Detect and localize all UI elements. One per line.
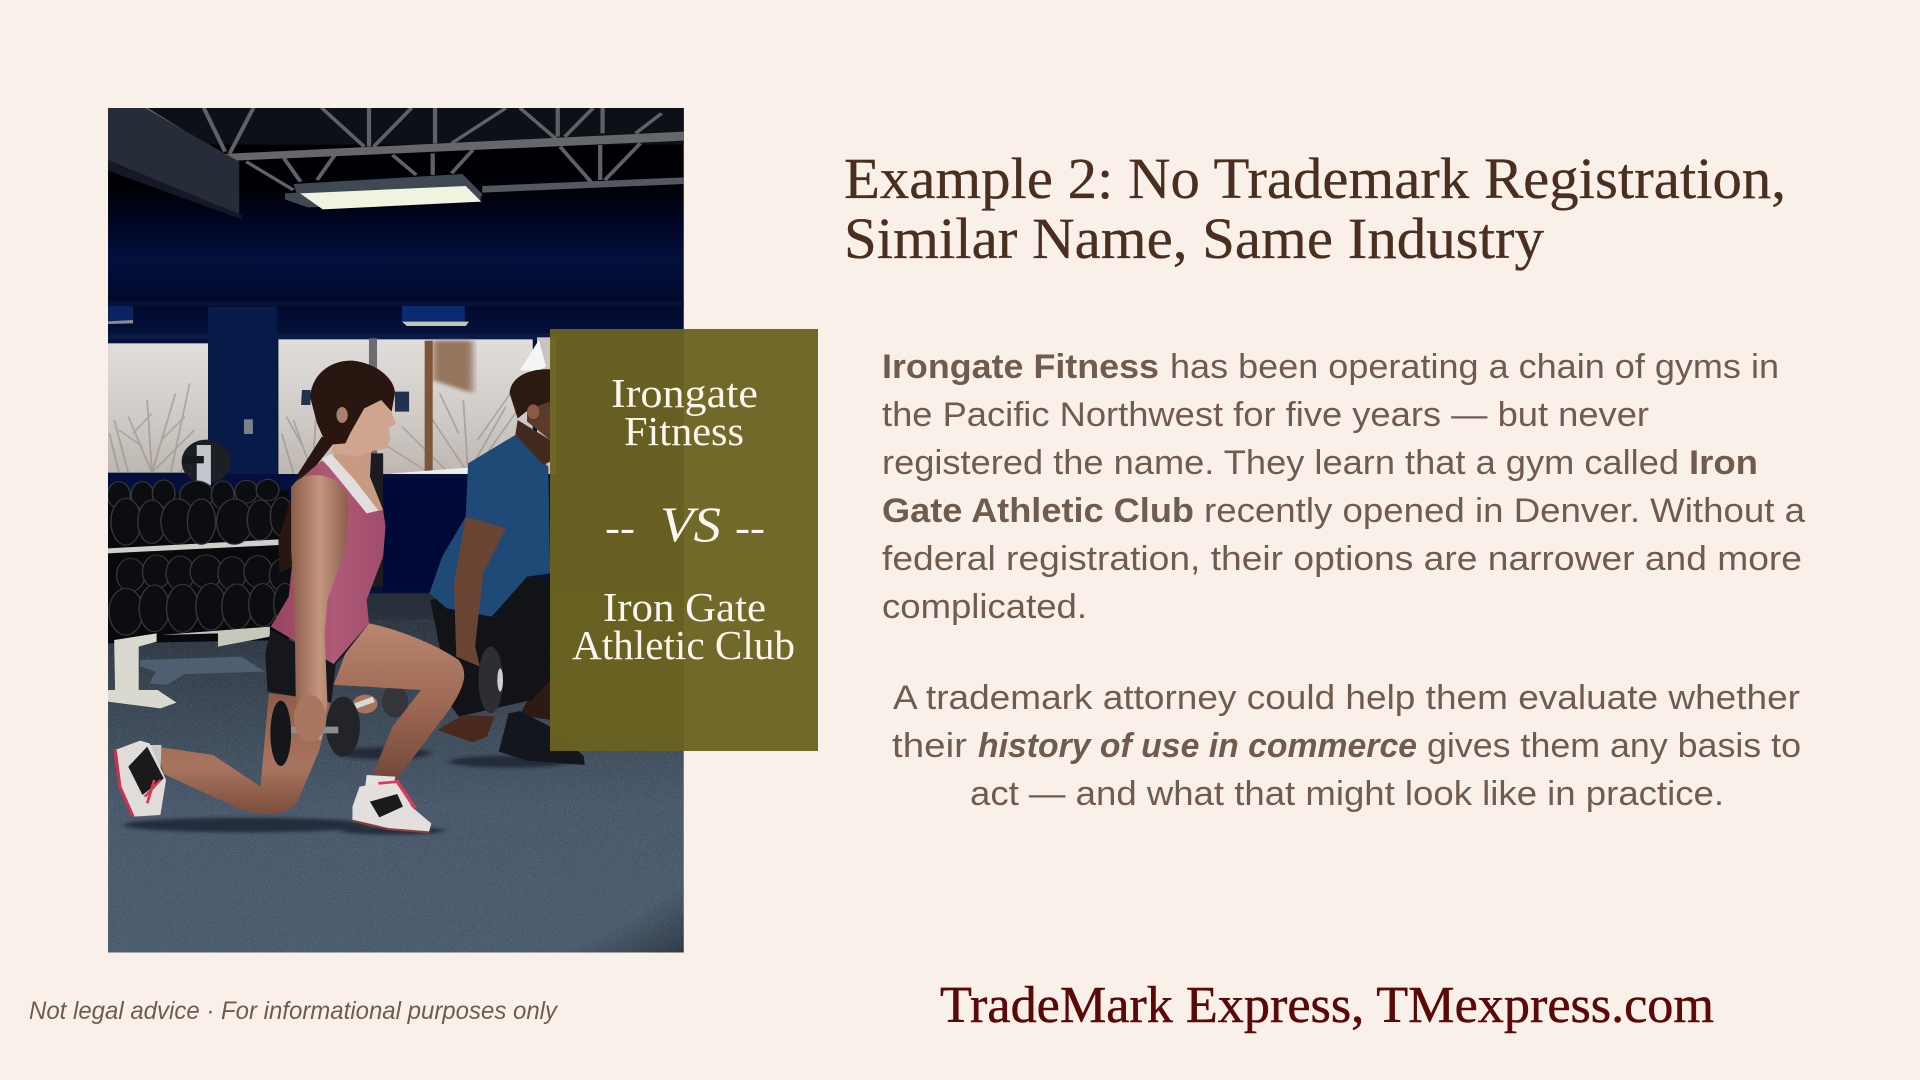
dumbbell rack xyxy=(108,479,296,708)
versus divider: -- xyxy=(605,504,635,550)
man xyxy=(429,369,585,765)
rear shoe xyxy=(115,741,166,817)
brand footer: TradeMark Express, TMexpress.com xyxy=(940,977,1714,1034)
title: Similar Name, Same Industry xyxy=(844,206,1544,271)
disclaimer: Not legal advice · For informational purposes only xyxy=(29,997,558,1025)
windows xyxy=(108,337,556,477)
woman's rear hand and second dumbbell xyxy=(353,688,408,718)
floor shadows xyxy=(124,747,572,835)
woman xyxy=(115,361,464,832)
text block: attorney paragraph: gives them any basis to xyxy=(1427,727,1801,765)
second name: Iron Gate Athletic Club: Iron Gate xyxy=(603,584,766,630)
rear leg xyxy=(157,693,331,814)
face xyxy=(331,395,396,457)
text block: attorney paragraph: their xyxy=(892,727,967,765)
first name: Irongate Fitness: Fitness xyxy=(624,408,744,454)
text block: scenario paragraph xyxy=(882,348,1806,626)
photo: two people doing lunges in a gym xyxy=(108,108,684,953)
text block: scenario paragraph: the Pacific Northwest for five years — but never xyxy=(882,396,1649,434)
ponytail xyxy=(278,437,334,573)
text block: attorney paragraph xyxy=(892,679,1801,813)
text block: scenario paragraph: federal registration, their options are narrower and more xyxy=(882,540,1802,578)
title: Example 2: No Trademark Registration, xyxy=(844,146,1786,211)
versus divider: -- xyxy=(735,504,765,550)
label panel: olive comparison box xyxy=(550,329,818,751)
weight machine xyxy=(182,390,409,587)
second name: Iron Gate Athletic Club xyxy=(572,584,795,668)
arm xyxy=(291,475,349,740)
text block: scenario paragraph: recently opened in Denver. Without a xyxy=(1204,492,1806,530)
floor xyxy=(108,593,684,953)
versus divider xyxy=(605,496,765,552)
text block: scenario paragraph: has been operating a chain of gyms in xyxy=(1170,348,1779,386)
front leg xyxy=(334,623,464,777)
front shoe xyxy=(352,775,431,832)
pillar xyxy=(208,307,277,480)
ceiling light xyxy=(285,174,482,209)
tank top xyxy=(271,461,385,664)
neck and chest xyxy=(333,452,384,511)
text block: scenario paragraph: Irongate Fitness xyxy=(882,348,1159,386)
back wall xyxy=(108,108,684,488)
second name: Iron Gate Athletic Club: Athletic Club xyxy=(572,622,795,668)
text block: attorney paragraph: history of use in commerce xyxy=(978,727,1417,765)
text block: scenario paragraph: Gate Athletic Club xyxy=(882,492,1194,530)
text block: scenario paragraph: registered the name. They learn that a gym called xyxy=(882,444,1679,482)
text block: scenario paragraph: Iron xyxy=(1689,444,1758,482)
shorts xyxy=(265,620,369,703)
wall below windows xyxy=(108,419,468,592)
carpet speckle xyxy=(108,620,684,953)
wall fixtures xyxy=(108,301,684,339)
text block: attorney paragraph: A trademark attorney could help them evaluate whether xyxy=(893,679,1800,717)
hair xyxy=(310,361,395,445)
ceiling trusses xyxy=(108,108,684,219)
text block: attorney paragraph: act — and what that might look like in practice. xyxy=(970,775,1724,813)
front dumbbell xyxy=(270,695,360,766)
text block: scenario paragraph: complicated. xyxy=(882,588,1087,626)
first name: Irongate Fitness: Irongate xyxy=(611,370,758,416)
title xyxy=(844,146,1786,271)
versus divider: VS xyxy=(660,496,721,552)
first name: Irongate Fitness xyxy=(611,370,758,454)
floor vignette xyxy=(583,896,684,952)
